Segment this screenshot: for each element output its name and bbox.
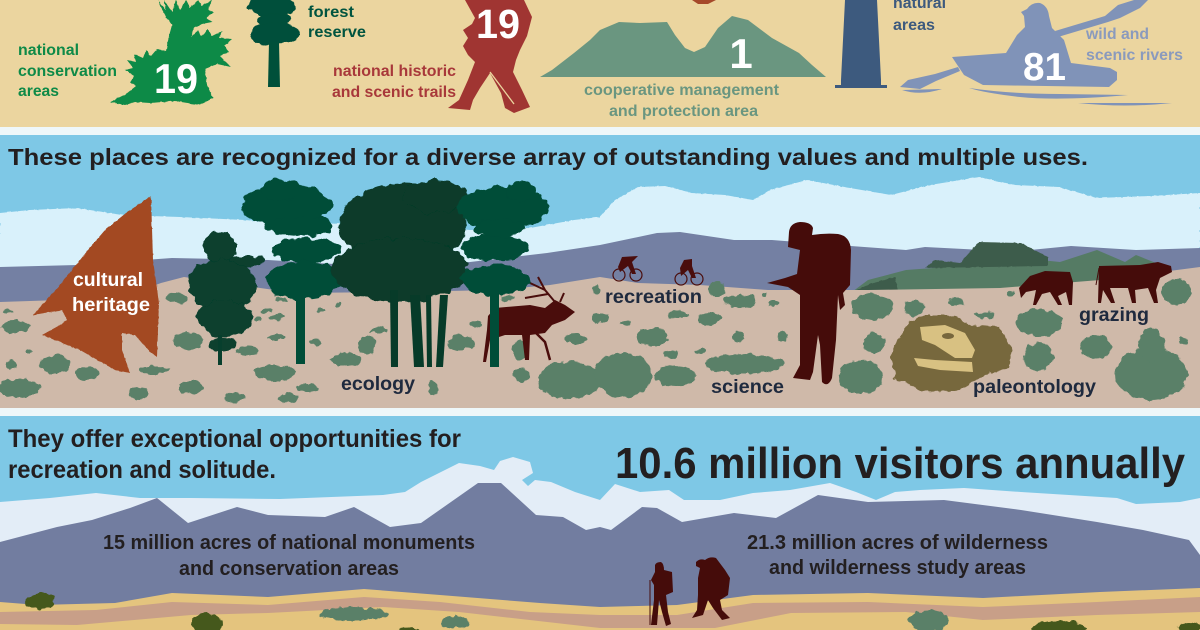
panel: designation counts — [0, 0, 1200, 127]
label: grazing: grazing — [1079, 305, 1149, 326]
background mountains — [0, 232, 1200, 320]
text: wild and scenic rivers: scenic rivers — [1086, 47, 1183, 64]
icon: two hikers — [650, 557, 730, 626]
icon: dinosaur fossil in rock — [891, 315, 1011, 392]
text: national conservation areas: national — [18, 42, 79, 59]
text: natural areas: areas — [893, 17, 935, 34]
icon: forest tree — [248, 0, 300, 87]
stat: visitors annually: 10.6 million visitors annually — [615, 439, 1186, 488]
text: natural areas — [893, 0, 946, 34]
ground — [0, 267, 1200, 408]
icon: elk — [483, 277, 575, 362]
number: 1 management area: 1 — [729, 30, 753, 77]
text: national monuments acreage: and conservation areas — [179, 558, 399, 580]
heading: recreation and solitude: recreation and solitude. — [8, 456, 276, 484]
clouds — [0, 177, 1200, 300]
text: cultural heritage: heritage — [72, 295, 150, 316]
clouds — [0, 457, 1200, 570]
text: national historic and scenic trails — [332, 63, 456, 101]
text: wilderness acreage: and wilderness study areas — [769, 557, 1026, 579]
icon: mountain for cooperative management area — [540, 16, 826, 77]
text: national historic and scenic trails: national historic — [333, 63, 456, 80]
panel: recreation and solitude — [0, 416, 1200, 630]
mountains — [0, 483, 1200, 620]
sagebrush shrubs — [0, 279, 1191, 403]
icon: grass tree for national conservation areas — [110, 0, 232, 105]
text: national conservation areas: conservation — [18, 63, 117, 80]
icon: monument tower for research natural areas — [835, 0, 887, 88]
icon: kayaker for wild and scenic rivers — [900, 0, 1172, 106]
heading: values and uses: These places are recognized for a diverse array of outstanding values and multiple uses. — [8, 144, 1088, 170]
text: cooperative management and protection area: cooperative management — [584, 82, 780, 99]
icon: orange element cut at top edge — [692, 0, 716, 4]
distant green hills — [852, 242, 1180, 292]
number: 81 rivers: 81 — [1023, 46, 1066, 89]
label: science: science — [711, 377, 784, 398]
text: wild and scenic rivers: wild and — [1085, 26, 1149, 43]
text: cooperative management and protection area — [584, 82, 780, 120]
tree: left pine — [242, 179, 342, 364]
text: cultural heritage — [72, 270, 150, 316]
panel: outstanding values landscape — [0, 135, 1200, 408]
text: wilderness acreage: 21.3 million acres of wilderness — [747, 532, 1048, 554]
text: cooperative management and protection area: and protection area — [609, 103, 758, 120]
text: forest reserve: forest — [308, 4, 355, 21]
text: forest reserve — [308, 4, 366, 41]
text: national conservation areas — [18, 42, 117, 100]
tree: right pine — [457, 181, 549, 367]
icon: grazing cows — [1019, 262, 1172, 305]
text: wild and scenic rivers — [1085, 26, 1183, 64]
shrubs — [26, 593, 1200, 630]
text: national historic and scenic trails: and scenic trails — [332, 84, 456, 101]
tree: small dark conifer — [188, 231, 263, 365]
text: national conservation areas: areas — [18, 83, 59, 100]
text: wilderness acreage — [747, 532, 1048, 579]
heading: recreation and solitude — [8, 425, 461, 484]
text: national monuments acreage — [103, 532, 475, 580]
label: recreation: recreation — [605, 287, 702, 308]
heading: recreation and solitude: They offer exceptional opportunities for — [8, 425, 461, 453]
label: ecology: ecology — [341, 374, 415, 395]
tan trail band — [0, 588, 1200, 630]
text: cultural heritage: cultural — [73, 270, 143, 291]
number: 19 trails: 19 — [476, 1, 520, 47]
pink trail path — [0, 597, 1200, 628]
number: 19 conservation areas: 19 — [154, 55, 198, 102]
icon: arrowhead for cultural heritage — [33, 196, 159, 373]
text: forest reserve: reserve — [308, 24, 366, 41]
icon: mountain bikers — [613, 256, 703, 285]
icon: hiker on historic trail — [448, 0, 532, 113]
icon: backpacker scientist — [767, 222, 851, 384]
tree: central dark grove — [332, 180, 468, 367]
text: national monuments acreage: 15 million acres of national monuments — [103, 532, 475, 554]
label: paleontology: paleontology — [973, 377, 1096, 398]
